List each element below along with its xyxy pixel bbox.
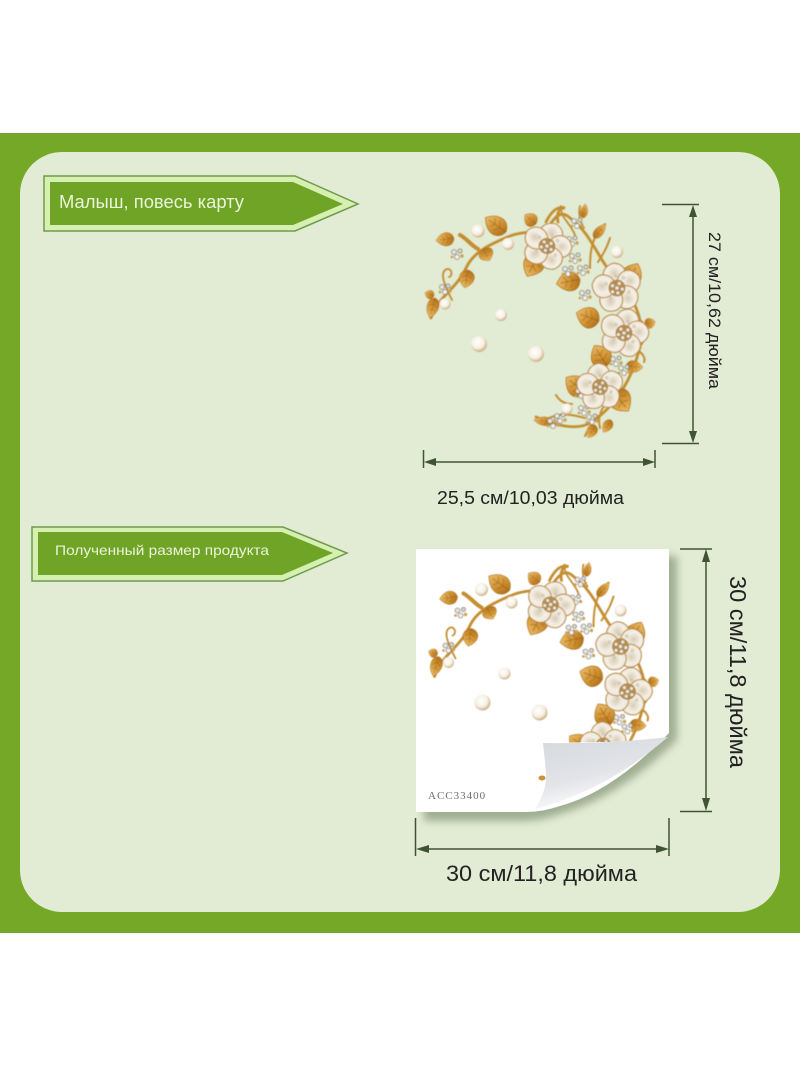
peeled flap	[535, 737, 668, 809]
heading arrow: received product size	[32, 527, 347, 581]
height dimension: sheet	[680, 549, 751, 812]
width dimension: sheet: 30 см/11,8 дюйма	[446, 861, 637, 886]
sticker sheet with peeled corner	[416, 549, 677, 821]
width dimension: sheet	[416, 818, 669, 886]
green background band	[0, 133, 800, 933]
floral wreath decal	[423, 203, 657, 440]
width dimension: decal: 25,5 см/10,03 дюйма	[437, 487, 625, 508]
wreath print on sheet	[428, 562, 660, 743]
height dimension: sheet: 30 см/11,8 дюйма	[725, 576, 751, 768]
width dimension: decal	[424, 450, 655, 508]
sheet	[416, 549, 669, 812]
heading arrow: hang the map: Малыш, повесь карту	[59, 192, 244, 212]
heading arrow: received product size: Полученный размер продукта	[55, 542, 269, 558]
gold print on sheet	[538, 776, 546, 780]
main panel	[20, 152, 780, 912]
height dimension: decal: 27 см/10,62 дюйма	[705, 232, 723, 390]
sheet shadow	[424, 556, 677, 821]
height dimension: decal	[662, 204, 723, 444]
product code: ACC33400	[428, 790, 486, 802]
heading arrow: hang the map	[44, 176, 358, 231]
